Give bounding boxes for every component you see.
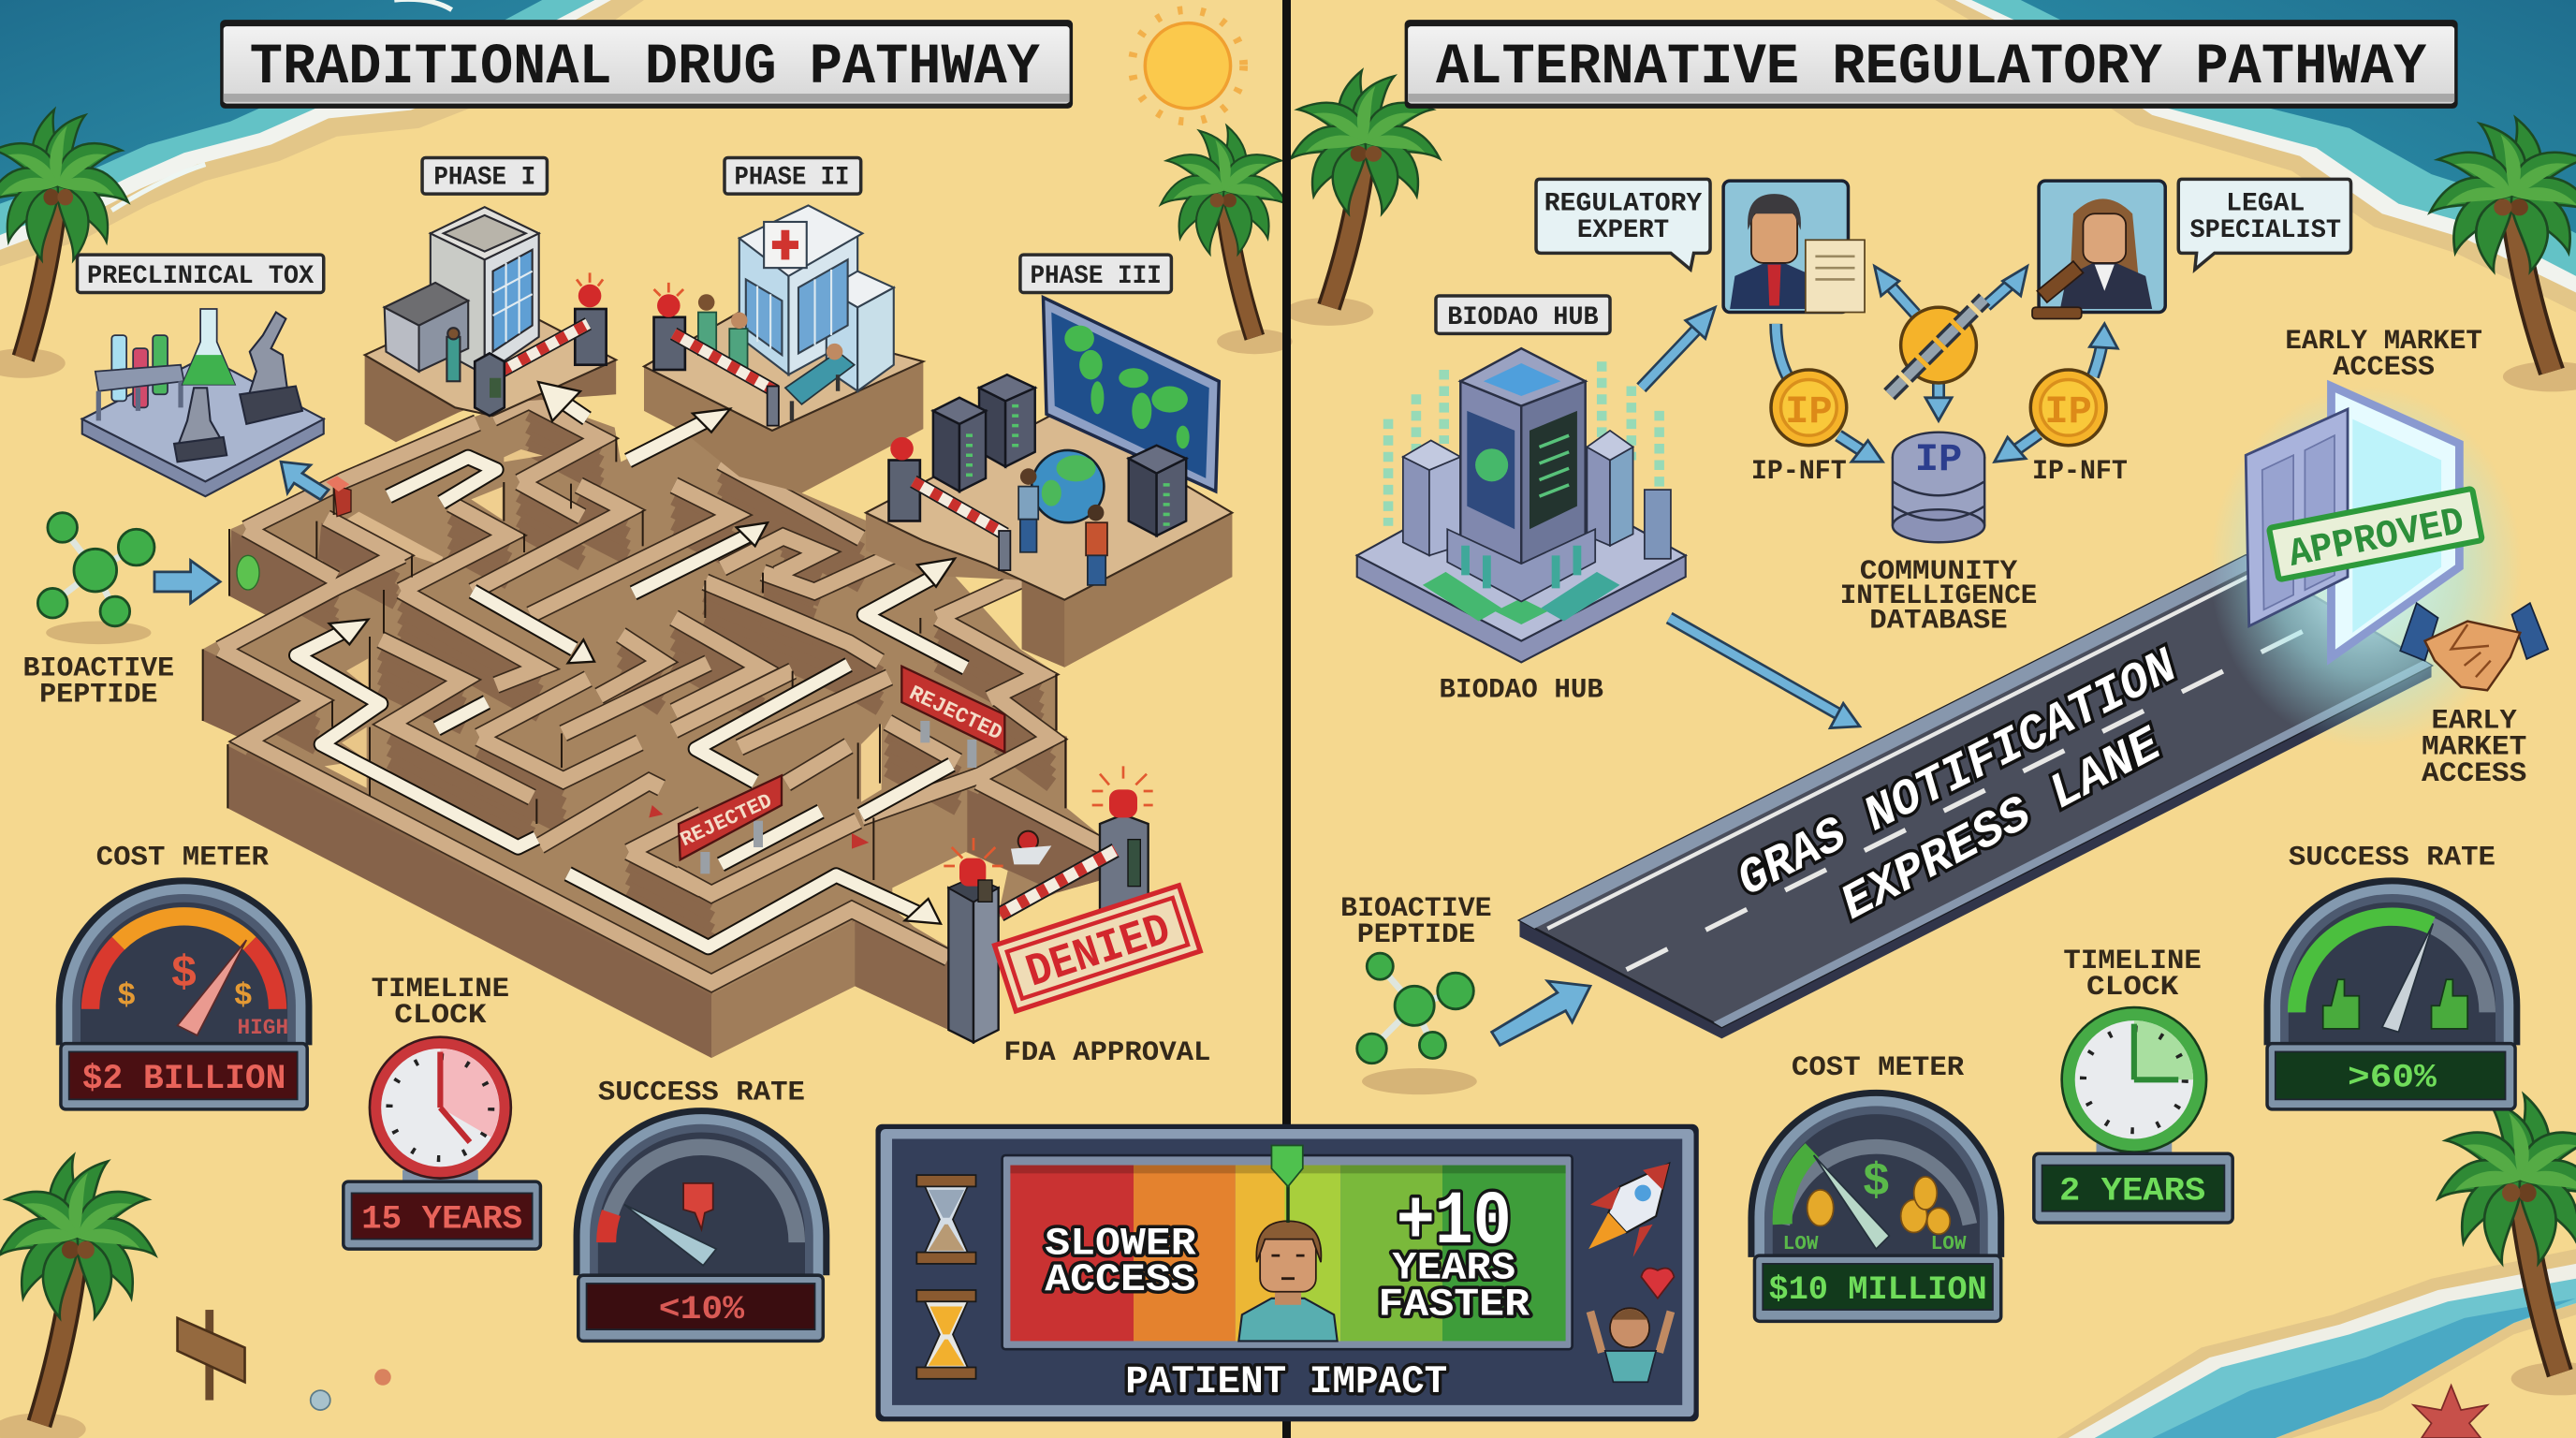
- ocean: top right: [1936, 0, 2576, 313]
- building: phase I lab: [385, 207, 539, 381]
- gauge: cost meter traditional: $: [234, 979, 253, 1015]
- gauge: cost meter alternative: LOW: [1783, 1233, 1819, 1255]
- gauge: timeline clock alternative: TIMELINE: [2063, 945, 2202, 976]
- plus ten years faster text: +10: [1397, 1181, 1512, 1266]
- arrow: peptide to road: [1492, 981, 1590, 1045]
- door: early market access: [2210, 387, 2522, 748]
- gauge: cost meter alternative: $10 MILLION: [1768, 1271, 1987, 1309]
- icon: sun: [1132, 10, 1244, 122]
- right pathway: [1340, 179, 2548, 1321]
- stamp: denied: DENIED: [1020, 903, 1177, 999]
- sign: rejected right: [901, 667, 1006, 768]
- panel: patient impact: [875, 1124, 1699, 1421]
- coin: IP-NFT right: [2030, 370, 2106, 446]
- icon: hourglass bottom: [916, 1290, 976, 1379]
- maze arrows approaching phase gates: [538, 382, 966, 668]
- maze wall tops: [220, 401, 1102, 983]
- label: bioactive peptide right: [1340, 892, 1492, 950]
- label: IP-NFT right: IP-NFT: [2032, 455, 2128, 487]
- gauge: success rate traditional: <10%: [659, 1291, 745, 1328]
- globe and people: [1018, 450, 1107, 585]
- gauge: timeline clock alternative: [2034, 945, 2232, 1223]
- label: early market access handshake: EARLY: [2432, 705, 2517, 737]
- gate marker: entry: [326, 476, 351, 517]
- icon: rocket: [1588, 1164, 1669, 1257]
- label: preclinical tox: PRECLINICAL TOX: [87, 262, 314, 291]
- gauge: timeline clock alternative: CLOCK: [2086, 971, 2178, 1003]
- maze: traditional pathway: [203, 396, 1153, 1058]
- gauge: success rate alternative: >60%: [2348, 1059, 2437, 1096]
- arrows: hub network: [1641, 266, 2117, 728]
- palm tree: bottom left: [0, 1152, 158, 1438]
- gauge: success rate traditional: [574, 1076, 829, 1341]
- callout: regulatory expert: EXPERT: [1577, 216, 1669, 245]
- gauge: cost meter alternative: COST METER: [1792, 1051, 1964, 1083]
- icon: handshake: [2400, 603, 2548, 690]
- label: phase I: PHASE I: [433, 164, 535, 193]
- gauge: timeline clock traditional: 15 YEARS: [361, 1200, 522, 1238]
- callout: legal specialist: LEGAL: [2226, 190, 2305, 219]
- gauge: success rate traditional: SUCCESS RATE: [598, 1076, 805, 1108]
- gauge: cost meter traditional: [56, 841, 312, 1109]
- ocean: bottom right: [2056, 1249, 2576, 1438]
- callout: regulatory expert: REGULATORY: [1544, 190, 1702, 219]
- callout: legal specialist: SPECIALIST: [2190, 216, 2341, 245]
- label: bioDAO hub tag: BIODAO HUB: [1447, 303, 1599, 332]
- label: early market access door: ACCESS: [2333, 351, 2435, 383]
- label: bioactive peptide: BIOACTIVE: [23, 652, 174, 683]
- wooden sign: [178, 1310, 245, 1401]
- gauge: cost meter alternative: [1748, 1051, 2004, 1321]
- gauge: success rate alternative: SUCCESS RATE: [2289, 841, 2496, 873]
- molecule: bioactive peptide right: [1357, 953, 1477, 1094]
- label: early market access handshake: ACCESS: [2422, 757, 2526, 789]
- platform: phase I: [365, 296, 616, 442]
- arrow: peptide to maze: [154, 561, 220, 603]
- label: community intelligence database: DATABASE: [1869, 605, 2008, 637]
- sign: rejected left: REJECTED: [677, 789, 776, 852]
- gauge: cost meter traditional: $: [117, 979, 136, 1015]
- title: traditional drug pathway: TRADITIONAL DRUG PATHWAY: [250, 36, 1040, 100]
- icon: hourglass top: [916, 1175, 976, 1264]
- callout: regulatory expert: [1536, 179, 1710, 270]
- title: traditional drug pathway: [220, 20, 1073, 109]
- maze corner lines: [203, 437, 1065, 880]
- starfish: [2413, 1386, 2487, 1438]
- maze path with arrows: [297, 457, 952, 947]
- label: bioactive peptide: [23, 652, 174, 711]
- gauge: cost meter traditional: $2 BILLION: [82, 1060, 285, 1099]
- patient portrait: [1238, 1221, 1338, 1341]
- coin: IP-NFT right: IP: [2044, 389, 2092, 434]
- label: bioDAO hub tag: [1436, 296, 1610, 333]
- building: phase II hospital: [739, 205, 894, 391]
- gauge: cost meter traditional: COST METER: [96, 841, 269, 873]
- palm tree: right panel top right: [2427, 116, 2576, 391]
- palm tree: bottom right: [2436, 1093, 2576, 1395]
- gauge: cost meter traditional: $: [170, 950, 198, 1000]
- palm tree: left panel right: [1159, 125, 1293, 354]
- arrow: to lab: [281, 462, 329, 500]
- title: alternative regulatory pathway: ALTERNATIVE REGULATORY PATHWAY: [1436, 36, 2426, 100]
- road: express lane: [1519, 555, 2432, 1038]
- gauge: cost meter traditional: HIGH: [237, 1016, 288, 1040]
- gauge: timeline clock traditional: CLOCK: [394, 999, 487, 1031]
- label: community intelligence database: COMMUNITY: [1860, 555, 2017, 587]
- divider: between pathways: [1282, 0, 1291, 1438]
- palm tree: right panel left: [1284, 68, 1442, 326]
- position marker: [1271, 1146, 1303, 1223]
- label: bioDAO hub: BIODAO HUB: [1439, 673, 1603, 705]
- label: bioactive peptide right: BIOACTIVE: [1340, 892, 1492, 924]
- portrait: legal specialist: [2032, 181, 2165, 319]
- platform: phase III: [866, 411, 1232, 668]
- molecule: bioactive peptide left: [37, 513, 154, 644]
- gauge: success rate alternative: [2264, 841, 2520, 1109]
- stamp: approved: APPROVED: [2285, 500, 2467, 578]
- label: bioactive peptide: PEPTIDE: [39, 679, 157, 711]
- slower access text: SLOWER: [1045, 1221, 1196, 1266]
- final gate: FDA approval barrier: [944, 766, 1153, 1042]
- label: early market access handshake: MARKET: [2422, 731, 2526, 763]
- staff and patient: [698, 294, 855, 420]
- coin with chain: [1889, 299, 1984, 394]
- road: express lane: GRAS NOTIFICATION: [1729, 638, 2187, 909]
- gauge: timeline clock traditional: [344, 973, 540, 1249]
- lab station: preclinical tox: [82, 309, 324, 496]
- gauge: cost meter alternative: LOW: [1931, 1233, 1967, 1255]
- coin: IP-NFT left: IP: [1785, 389, 1833, 434]
- gate: phase III barrier: [889, 437, 1010, 570]
- platforms and stations: [23, 205, 1232, 1068]
- gauge: timeline clock alternative: 2 YEARS: [2059, 1172, 2205, 1210]
- plus ten years faster text: YEARS: [1392, 1246, 1515, 1291]
- label: phase II: PHASE II: [735, 164, 849, 193]
- coin: IP-NFT left: [1771, 370, 1847, 446]
- platform: phase II: [644, 313, 923, 493]
- label: bioactive peptide right: PEPTIDE: [1357, 918, 1475, 950]
- label: community intelligence database: [1840, 555, 2037, 637]
- plus ten years faster text: [1379, 1181, 1530, 1327]
- gauge: cost meter alternative: $: [1863, 1156, 1890, 1209]
- servers: [933, 374, 1186, 536]
- plus ten years faster text: FASTER: [1379, 1282, 1530, 1327]
- slower access text: [1045, 1221, 1196, 1302]
- road: express lane: EXPRESS LANE: [1832, 716, 2172, 932]
- label: early market access door: [2285, 325, 2482, 383]
- stamp: denied: [995, 886, 1200, 1011]
- slower access text: ACCESS: [1045, 1257, 1196, 1302]
- label: patient impact: PATIENT IMPACT: [1125, 1359, 1447, 1404]
- hub: bioDAO building: [1357, 348, 1686, 662]
- callout: legal specialist: [2178, 179, 2351, 270]
- label: community intelligence database: INTELLIGENCE: [1840, 580, 2037, 611]
- gate: phase II barrier: [654, 283, 779, 426]
- world map screen: [1043, 298, 1219, 492]
- label: early market access door: EARLY MARKET: [2285, 325, 2482, 357]
- label: FDA approval: FDA APPROVAL: [1003, 1036, 1211, 1068]
- sign: rejected right: REJECTED: [905, 681, 1006, 745]
- portrait: regulatory expert: [1723, 181, 1865, 313]
- pebbles and shell: [311, 1369, 391, 1410]
- ocean: top left: [0, 0, 644, 266]
- database: community intelligence: IP: [1915, 437, 1962, 482]
- flags and alarm: [649, 805, 1051, 864]
- label: early market access handshake: [2422, 705, 2526, 789]
- impact bar: [1003, 1155, 1573, 1349]
- label: phase III: PHASE III: [1030, 262, 1162, 291]
- palm tree: top left: [0, 108, 131, 378]
- sand entrance before gate: [892, 852, 1008, 952]
- peptide at maze entrance: [237, 555, 259, 590]
- sign: rejected left: [677, 775, 782, 873]
- icon: happy patient: [1590, 1269, 1674, 1382]
- gauge: timeline clock traditional: TIMELINE: [372, 973, 509, 1005]
- label: IP-NFT left: IP-NFT: [1751, 455, 1847, 487]
- gate: phase I barrier: [475, 272, 607, 416]
- database: community intelligence: [1893, 433, 1984, 542]
